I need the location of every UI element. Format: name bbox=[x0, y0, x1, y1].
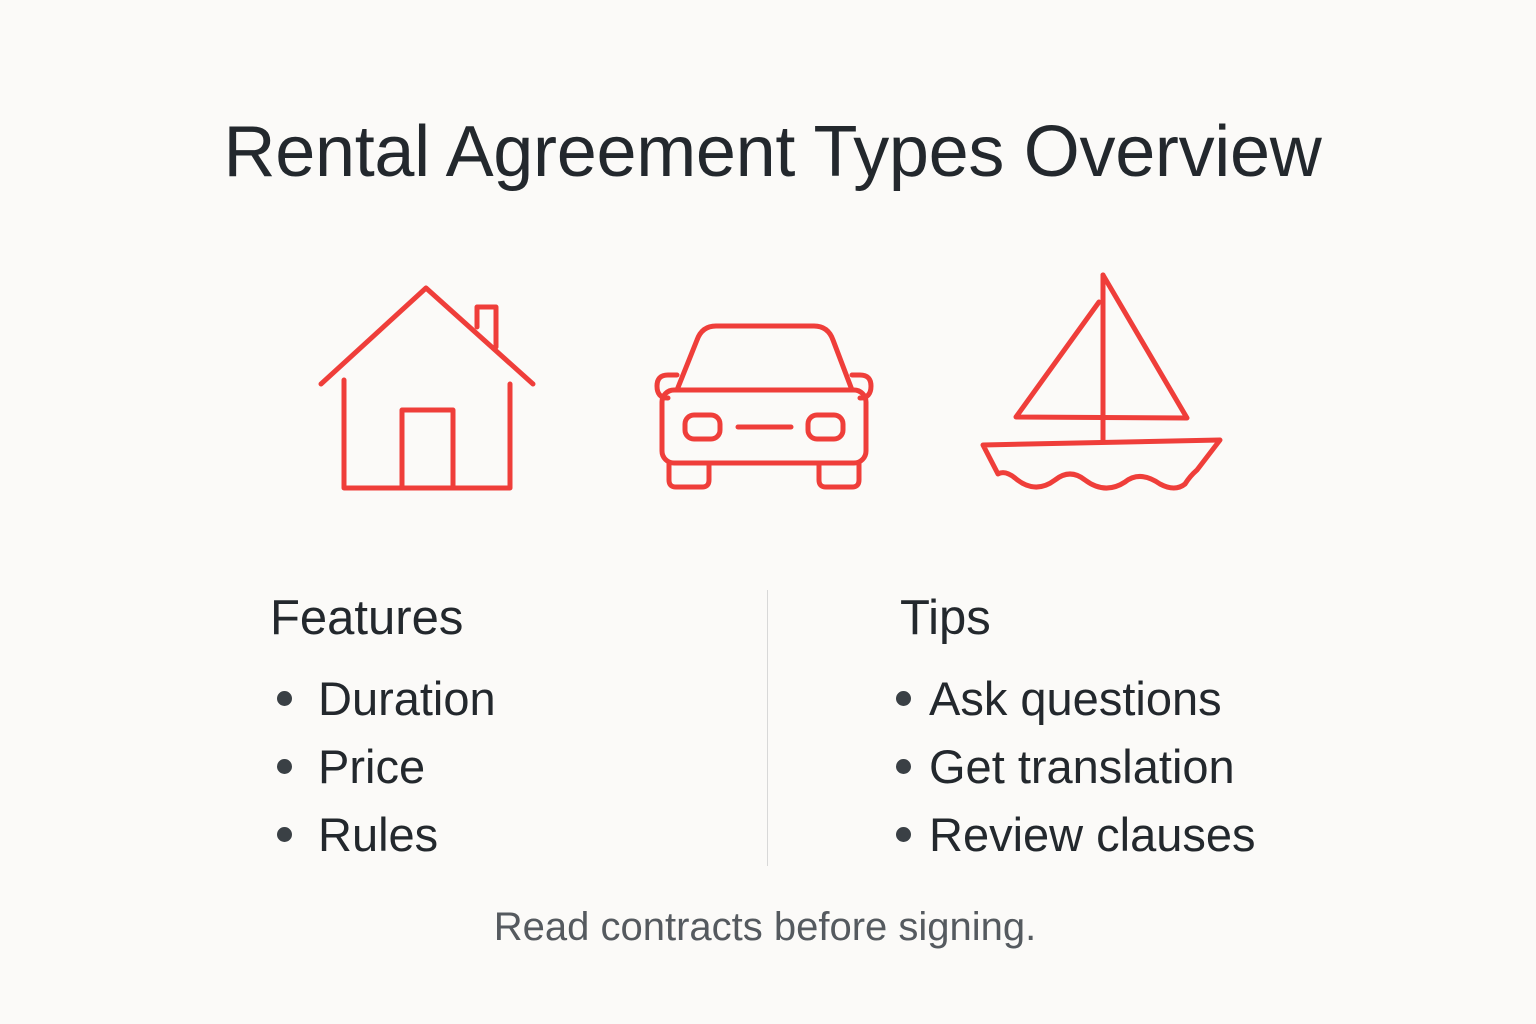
list: features bbox=[277, 672, 496, 861]
panel: tips bbox=[896, 591, 1256, 861]
panel: features bbox=[270, 591, 496, 861]
list: tips bbox=[896, 672, 1256, 861]
list: tips: Ask questions bbox=[929, 672, 1222, 725]
heading: tips: Tips bbox=[900, 591, 991, 645]
divider bbox=[767, 590, 768, 866]
icons bbox=[318, 272, 1222, 491]
list: features: Duration bbox=[318, 672, 496, 725]
heading: features: Features bbox=[270, 591, 463, 645]
footer note: Read contracts before signing. bbox=[494, 905, 1036, 949]
title: Rental Agreement Types Overview bbox=[224, 112, 1321, 192]
icon: sailboat bbox=[983, 275, 1220, 488]
list: features: Price bbox=[318, 740, 425, 793]
icon: car bbox=[657, 326, 871, 487]
list: features: Rules bbox=[318, 808, 438, 861]
icon: house bbox=[321, 288, 533, 488]
list: tips: Get translation bbox=[929, 740, 1235, 793]
list: tips: Review clauses bbox=[929, 808, 1256, 861]
